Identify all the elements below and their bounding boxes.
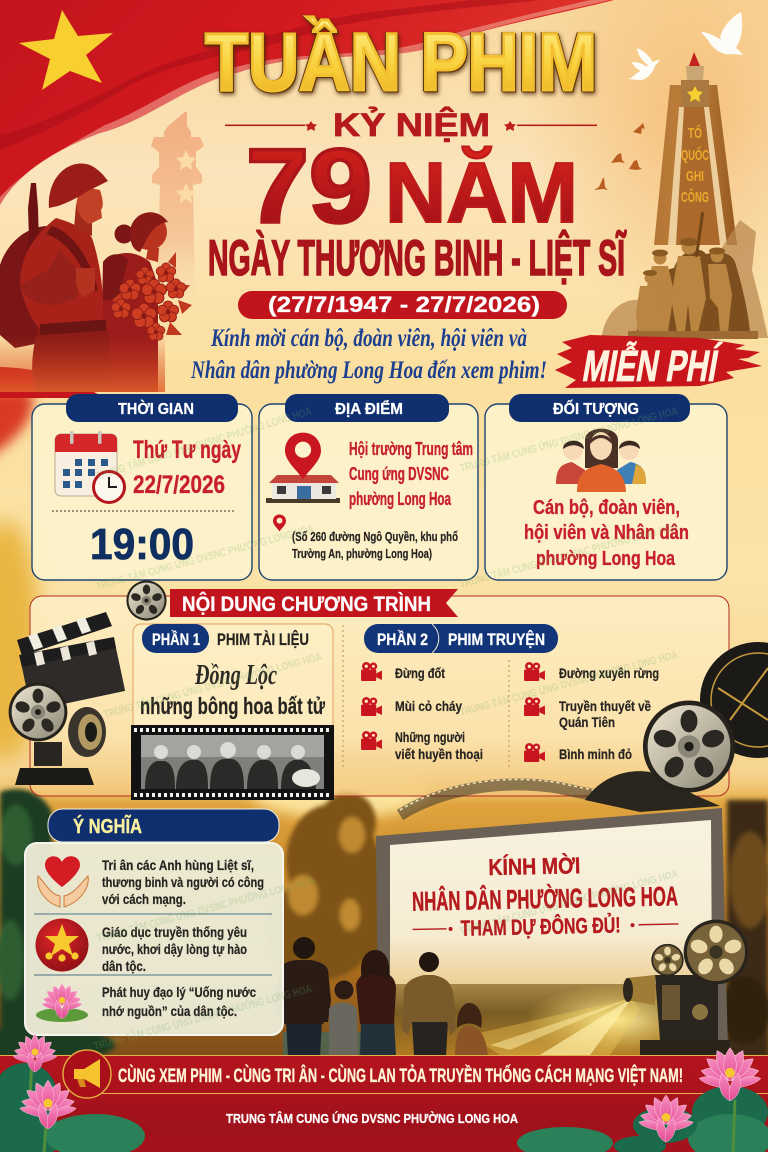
invitation script text bbox=[190, 325, 547, 384]
date pill bbox=[238, 291, 567, 319]
icon: large film reels and film strip bbox=[400, 642, 768, 815]
film list right: Đường xuyên rừng bbox=[559, 665, 659, 681]
part 2 pill bbox=[364, 624, 558, 653]
part 1 pill: PHẦN 1 bbox=[152, 630, 200, 649]
woman soldier bbox=[100, 212, 168, 392]
header: venue bbox=[285, 394, 449, 422]
mother bbox=[356, 950, 396, 1056]
date pill: (27/7/1947 - 27/7/2026) bbox=[268, 292, 540, 317]
film list left: Đừng đốt bbox=[395, 665, 445, 681]
icon: people bbox=[556, 429, 646, 492]
film list left bbox=[361, 662, 483, 762]
film list right bbox=[524, 662, 659, 762]
monument inscription: QUỐC bbox=[681, 146, 709, 164]
doves bbox=[629, 12, 743, 80]
header: time bbox=[66, 394, 238, 422]
heading: Kỷ niệm with star rules bbox=[225, 107, 597, 143]
light beams bbox=[525, 984, 705, 1056]
meaning text 2: dân tộc. bbox=[102, 959, 146, 974]
soldiers illustration bbox=[0, 163, 192, 392]
venue name: phường Long Hoa bbox=[349, 489, 452, 509]
meaning text 3: nhớ nguồn” của dân tộc. bbox=[102, 1004, 237, 1019]
family silhouettes bbox=[273, 937, 488, 1056]
watermarks: TRUNG TÂM CUNG ỨNG DVSNC PHƯỜNG LONG HOA bbox=[95, 874, 316, 945]
part 1 label: PHIM TÀI LIỆU bbox=[217, 630, 309, 649]
venue address: Trường An, phường Long Hoa) bbox=[292, 547, 432, 561]
film title script: Đồng Lộc bbox=[194, 659, 277, 691]
audience text bbox=[524, 497, 689, 570]
footer banner bbox=[0, 1050, 768, 1152]
venue name: Cung ứng DVSNC bbox=[349, 464, 449, 484]
date text: 22/7/2026 bbox=[133, 471, 225, 499]
panel: meaning bbox=[25, 809, 283, 1035]
film list right: Truyền thuyết về bbox=[559, 698, 651, 714]
title: Tuần Phim: TUẦN PHIM bbox=[205, 17, 597, 108]
icon: calendar and clock bbox=[55, 431, 124, 502]
meaning text 3: Phát huy đạo lý “Uống nước bbox=[102, 985, 256, 1000]
screen text: invitation: THAM DỰ ĐÔNG ĐỦ! bbox=[460, 912, 621, 941]
film list left: Mùi cỏ cháy bbox=[395, 698, 462, 714]
meaning text 2 bbox=[102, 925, 247, 974]
small birds bbox=[594, 123, 645, 190]
meaning text 1 bbox=[102, 858, 264, 907]
monument inscription: CÔNG bbox=[681, 188, 709, 206]
film list right: Quán Tiên bbox=[559, 714, 615, 730]
backpack bbox=[0, 226, 55, 348]
venue name: Hội trường Trung tâm bbox=[349, 439, 473, 459]
audience text: Cán bộ, đoàn viên, bbox=[533, 497, 680, 519]
tower silhouette bbox=[151, 112, 204, 295]
audience text: phường Long Hoa bbox=[536, 548, 676, 570]
monument bbox=[600, 52, 768, 339]
father two bbox=[402, 952, 456, 1056]
film strip photo bbox=[131, 725, 334, 800]
heading: 79 năm: NĂM bbox=[385, 146, 578, 241]
film list right: Bình minh đỏ bbox=[559, 746, 632, 762]
watermarks: TRUNG TÂM CUNG ỨNG DVSNC PHƯỜNG LONG HOA bbox=[94, 522, 315, 593]
soldier trousers bbox=[32, 322, 111, 392]
heading: Kỷ niệm with star rules: KỶ NIỆM bbox=[333, 107, 490, 143]
meaning text 2: Giáo dục truyền thống yêu bbox=[102, 925, 247, 940]
meaning text 2: nước, khơi dậy lòng tự hào bbox=[102, 942, 247, 957]
header: audience: ĐỐI TƯỢNG bbox=[553, 398, 639, 418]
part 2 pill: PHIM TRUYỆN bbox=[448, 630, 545, 649]
watermarks: TRUNG TÂM CUNG ỨNG DVSNC PHƯỜNG LONG HOA bbox=[458, 867, 679, 938]
monument inscription: GHI bbox=[686, 168, 704, 185]
part 2 pill: PHẦN 2 bbox=[377, 630, 428, 649]
panel: time bbox=[32, 394, 252, 580]
watermarks bbox=[92, 404, 679, 1053]
screen text: invitation: KÍNH MỜI bbox=[488, 851, 581, 880]
panel: venue bbox=[259, 394, 478, 580]
outdoor cinema screen bbox=[376, 808, 728, 1056]
icon: heart in hands bbox=[38, 856, 88, 907]
venue address: (Số 260 đường Ngô Quyền, khu phố bbox=[292, 530, 458, 544]
film title: những bông hoa bất tử bbox=[140, 693, 325, 719]
part 1 pill bbox=[142, 624, 209, 653]
statue group bbox=[600, 212, 768, 339]
bottom scene: trees and sky bbox=[0, 766, 768, 1063]
meaning text 1: thương binh và người có công bbox=[102, 875, 264, 890]
date text bbox=[133, 436, 241, 499]
icon: ribbon film reel bbox=[126, 580, 167, 621]
audience text: hội viên và Nhân dân bbox=[524, 522, 689, 544]
organizer: TRUNG TÂM CUNG ỨNG DVSNC PHƯỜNG LONG HOA bbox=[226, 1111, 518, 1126]
invitation script text: Kính mời cán bộ, đoàn viên, hội viên và bbox=[210, 325, 527, 352]
icon: map pin and hall bbox=[266, 433, 340, 503]
icon: star badge bbox=[36, 918, 88, 972]
lotus group right bbox=[517, 1048, 768, 1152]
header: venue: ĐỊA ĐIỂM bbox=[335, 399, 403, 418]
projector bbox=[623, 920, 748, 1056]
watermarks: TRUNG TÂM CUNG ỨNG DVSNC PHƯỜNG LONG HOA bbox=[92, 982, 313, 1053]
monument inscription bbox=[681, 124, 709, 206]
date text: Thứ Tư ngày bbox=[133, 436, 241, 464]
watermarks: TRUNG TÂM CUNG ỨNG DVSNC PHƯỜNG LONG HOA bbox=[94, 405, 313, 483]
meaning heading: Ý NGHĨA bbox=[73, 814, 142, 838]
panel: audience bbox=[485, 394, 727, 580]
bouquet bbox=[111, 252, 192, 340]
watermarks: TRUNG TÂM CUNG ỨNG DVSNC PHƯỜNG LONG HOA bbox=[102, 650, 323, 721]
soldier jacket bbox=[20, 218, 103, 330]
rifle bbox=[26, 183, 39, 273]
watermarks: TRUNG TÂM CUNG ỨNG DVSNC PHƯỜNG LONG HOA bbox=[458, 648, 679, 719]
lower left flag swirl bbox=[0, 367, 105, 398]
soldier face and helmet bbox=[74, 205, 92, 236]
icon: clapperboard and projector bbox=[9, 612, 125, 785]
meaning text 1: Tri ân các Anh hùng Liệt sĩ, bbox=[102, 858, 254, 873]
icon: small pin bbox=[273, 515, 286, 531]
monument inscription: TỔ bbox=[688, 124, 702, 142]
lotus group left bbox=[0, 1034, 145, 1152]
child one bbox=[329, 980, 358, 1056]
watermarks: TRUNG TÂM CUNG ỨNG DVSNC PHƯỜNG LONG HOA bbox=[458, 520, 679, 591]
venue address bbox=[292, 530, 458, 561]
watermarks: TRUNG TÂM CUNG ỨNG DVSNC PHƯỜNG LONG HOA bbox=[458, 404, 679, 475]
film list left: Những người bbox=[395, 729, 465, 745]
venue name bbox=[349, 439, 473, 509]
meaning text 3 bbox=[102, 985, 256, 1019]
icon: lotus bbox=[36, 984, 88, 1022]
meaning heading bbox=[48, 809, 279, 842]
invitation script text: Nhân dân phường Long Hoa đến xem phim! bbox=[190, 357, 547, 384]
girl bbox=[455, 1003, 488, 1056]
panel: programme bbox=[30, 580, 729, 800]
film list left: viết huyền thoại bbox=[395, 746, 483, 762]
heading: 79 năm bbox=[246, 128, 578, 245]
ribbon heading: NỘI DUNG CHƯƠNG TRÌNH bbox=[182, 592, 431, 616]
flag star bbox=[19, 10, 113, 90]
time value: 19:00 bbox=[90, 520, 194, 569]
father bbox=[273, 937, 331, 1056]
flag: red waving banner bbox=[0, 0, 614, 205]
screen text: invitation bbox=[411, 849, 679, 942]
heading: 79 năm: 79 bbox=[246, 128, 372, 245]
icon: megaphone bbox=[63, 1050, 111, 1098]
header: time: THỜI GIAN bbox=[118, 399, 194, 418]
meaning text 1: với cách mạng. bbox=[102, 892, 186, 907]
box: part 1 documentary bbox=[133, 624, 333, 739]
header: audience bbox=[509, 394, 690, 422]
